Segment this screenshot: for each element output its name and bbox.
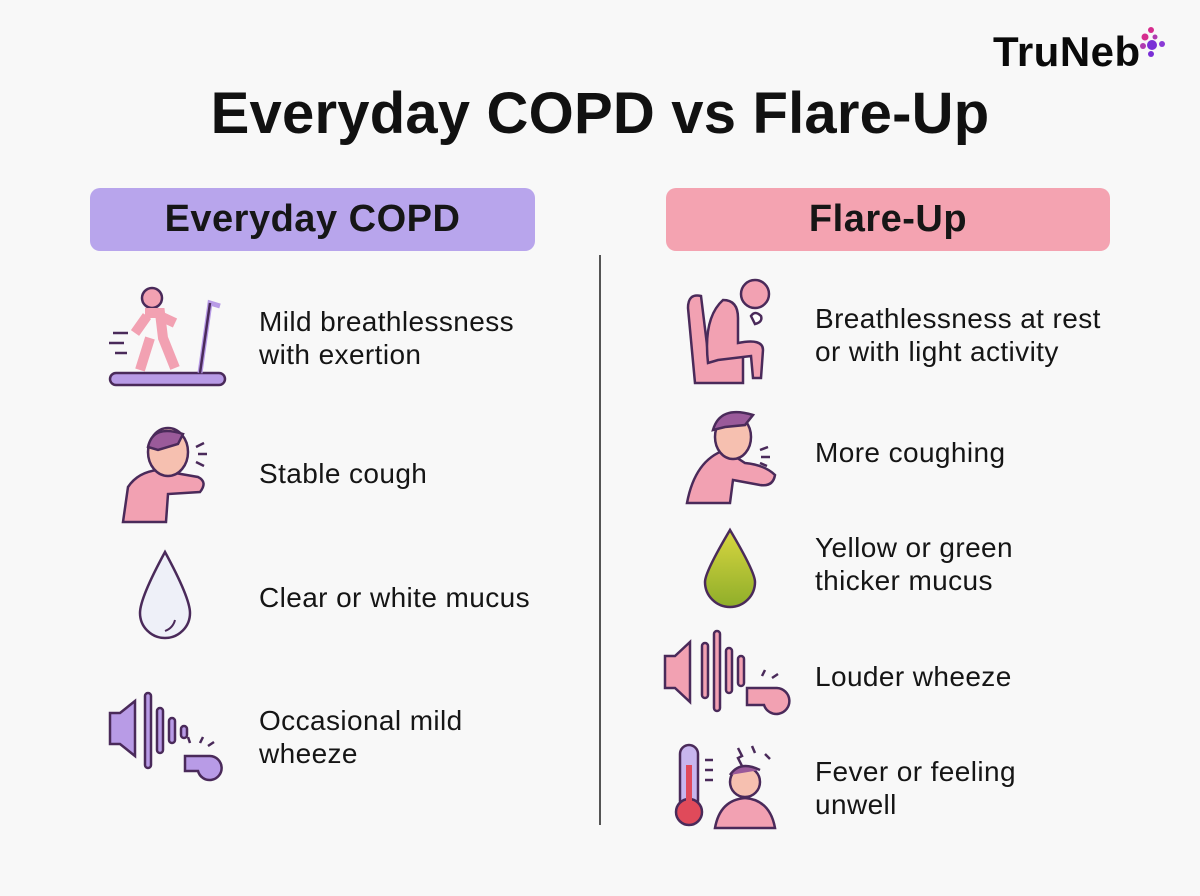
icon: sitting breathless (686, 278, 770, 384)
text: yellow mucus (815, 532, 1013, 596)
title: Everyday COPD vs Flare-Up (211, 81, 989, 146)
text: occasional wheeze (259, 705, 463, 769)
text: breathlessness at rest (815, 303, 1101, 367)
text: occasional wheeze: Occasional mild (259, 705, 463, 736)
heading: everyday: Everyday COPD (165, 198, 460, 240)
text: mild breathlessness (259, 306, 514, 370)
icon: more coughing (686, 410, 776, 504)
icon: stable cough (122, 426, 207, 524)
icon: mild wheeze (108, 692, 223, 782)
text: more coughing: More coughing (815, 437, 1005, 468)
text: fever: unwell (815, 789, 897, 820)
text: louder wheeze: Louder wheeze (815, 661, 1012, 692)
icon: louder wheeze (664, 630, 791, 716)
icon: fever (674, 744, 776, 830)
icon: clear drop (138, 550, 192, 640)
text: breathlessness at rest: or with light activity (815, 336, 1059, 367)
text: yellow mucus: Yellow or green (815, 532, 1013, 563)
heading: flare-up (666, 188, 1110, 251)
text: stable cough: Stable cough (259, 458, 427, 489)
text: mild breathlessness: with exertion (259, 339, 421, 370)
text: clear mucus: Clear or white mucus (259, 582, 530, 613)
text: yellow mucus: thicker mucus (815, 565, 993, 596)
icon: treadmill (108, 286, 226, 386)
text: fever: Fever or feeling (815, 756, 1016, 787)
text: mild breathlessness: Mild breathlessness (259, 306, 514, 337)
heading: everyday (90, 188, 535, 251)
logo: TruNeb (993, 28, 1141, 75)
icon: yellow-green drop (704, 528, 756, 608)
text: occasional wheeze: wheeze (259, 738, 358, 769)
heading: flare-up: Flare-Up (809, 198, 967, 240)
text: breathlessness at rest: Breathlessness at rest (815, 303, 1101, 334)
text: fever (815, 756, 1016, 820)
